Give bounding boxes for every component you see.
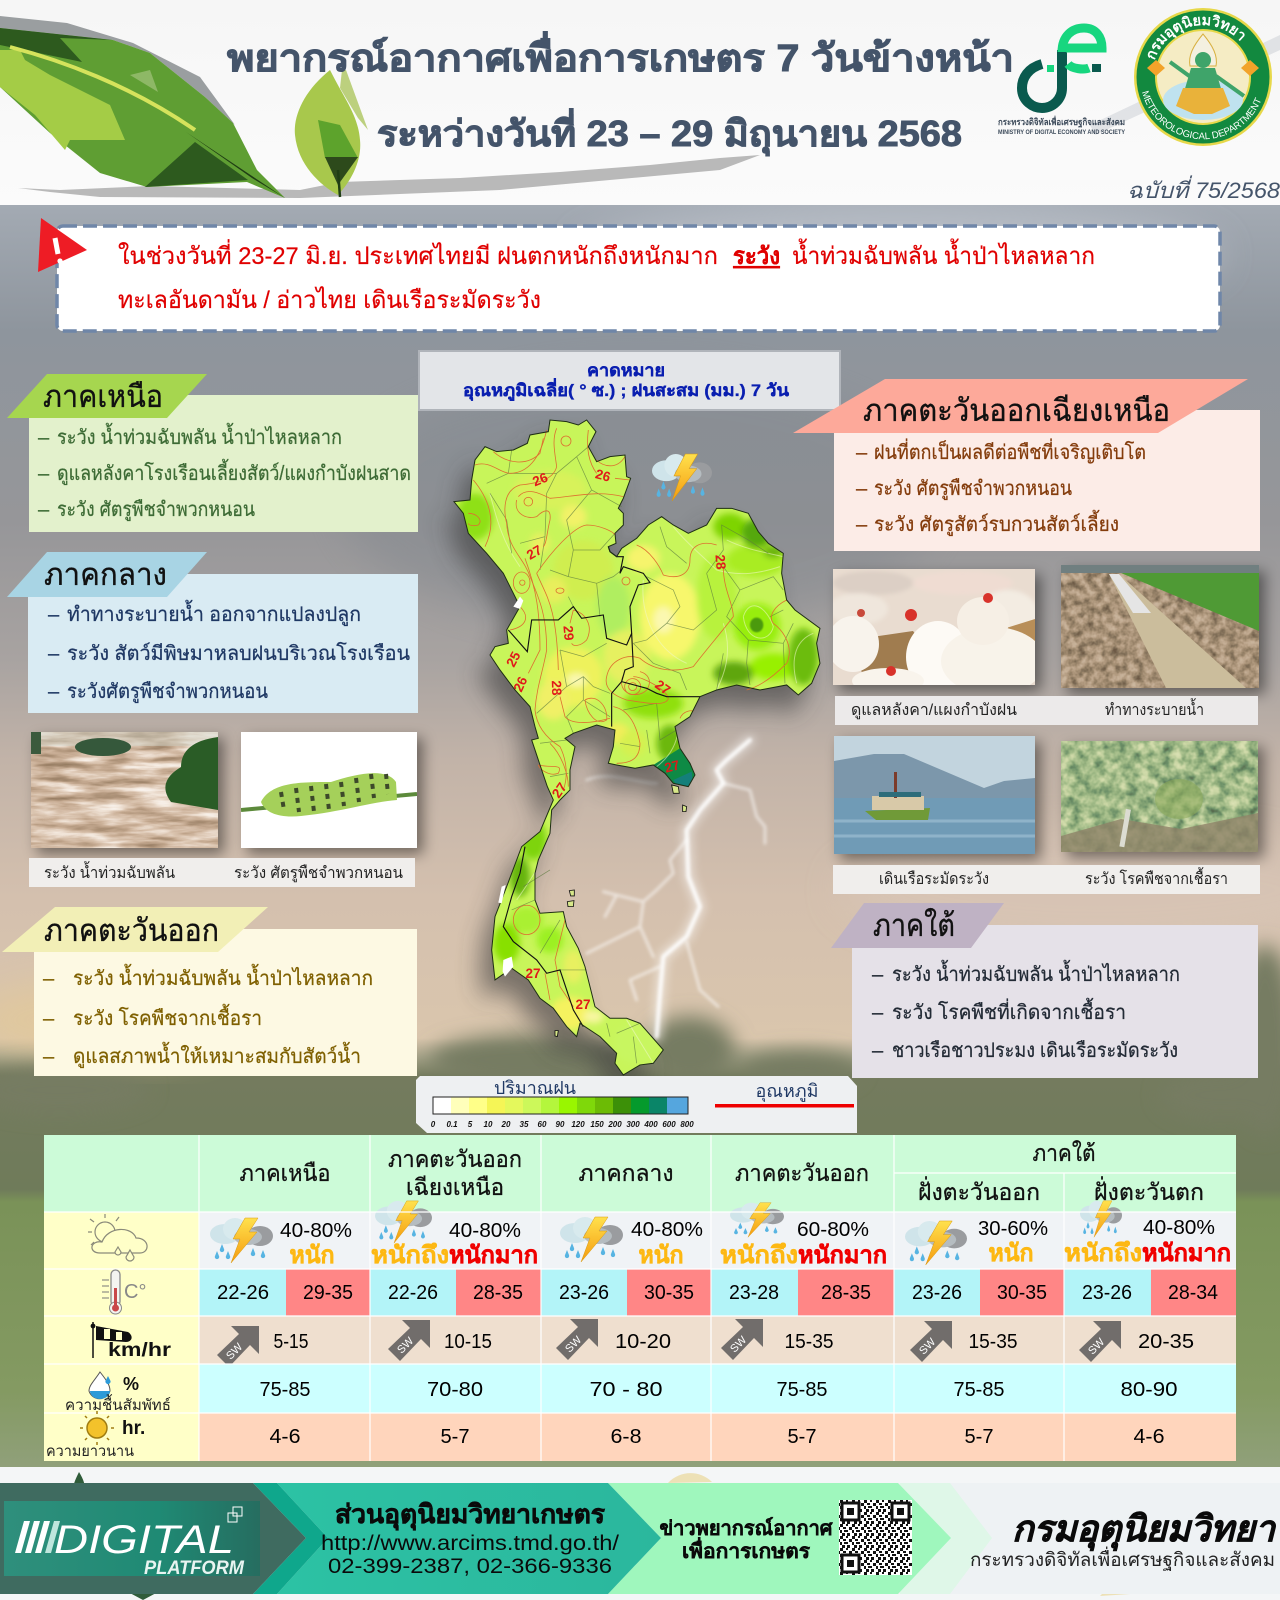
- icon: windsock with unit: [91, 1322, 172, 1361]
- caption bar: west photos: ระวัง ศัตรูพืชจำพวกหนอน: [234, 864, 403, 883]
- caption bar: south photos: ระวัง โรคพืชจากเชื้อรา: [1085, 867, 1228, 888]
- footer: agromet news: ข่าวพยากรณ์อากาศ: [660, 1517, 834, 1540]
- panel: central: –: [48, 681, 60, 703]
- row label column: [44, 1212, 199, 1461]
- temperature labels: 25: [503, 649, 524, 669]
- legend: rainfall and temperature: 35: [520, 1120, 529, 1129]
- temperature labels: 26: [530, 470, 550, 489]
- weather row: หนัก: [988, 1240, 1034, 1267]
- alert box: น้ำท่วมฉับพลัน น้ำป่าไหลหลาก: [792, 238, 1095, 270]
- panel: central: –: [48, 604, 60, 626]
- digital platform logo: PLATFORM: [144, 1558, 245, 1579]
- table header row: ภาคใต้: [1032, 1140, 1096, 1166]
- panel: east: ระวัง น้ำท่วมฉับพลัน น้ำป่าไหลหลาก: [73, 964, 373, 990]
- icon: sunshine: [46, 1411, 145, 1460]
- panel: legend heading: อุณหภูมิเฉลี่ย( ° ซ.) ; ฝนสะสม (มม.) 7 วัน: [463, 378, 789, 402]
- weather row: 40-80%: [449, 1220, 521, 1242]
- humidity row: [199, 1364, 1236, 1413]
- heading tab: south: [831, 903, 1004, 948]
- panel: north: ดูแลหลังคาโรงเรือนเลี้ยงสัตว์/แผงกำบังฝนสาด: [57, 459, 411, 486]
- panel: northeast: [793, 379, 1260, 551]
- table header row: ภาคเหนือ: [240, 1160, 330, 1186]
- wind row: 15-35: [784, 1331, 834, 1353]
- panel: northeast: ระวัง ศัตรูพืชจำพวกหนอน: [874, 478, 1072, 501]
- temperature row: [199, 1269, 1236, 1316]
- legend: rainfall and temperature: 90: [556, 1120, 565, 1129]
- temperature labels: 27: [524, 542, 545, 563]
- temperature labels: 28: [712, 554, 729, 571]
- temperature row: 23-26: [912, 1282, 962, 1304]
- panel: northeast: –: [856, 442, 868, 464]
- legend: rainfall and temperature: 200: [607, 1120, 622, 1129]
- footer: agromet division contact: ส่วนอุตุนิยมวิทยาเกษตร: [335, 1499, 605, 1531]
- caption bar: south photos: เดินเรือระมัดระวัง: [879, 870, 989, 888]
- legend: rainfall and temperature: 150: [590, 1120, 604, 1129]
- forecast table: [44, 1135, 1236, 1461]
- logo: ministry of digital economy: MINISTRY OF DIGITAL ECONOMY AND SOCIETY: [998, 129, 1126, 136]
- table header row: ภาคตะวันออก: [388, 1146, 522, 1172]
- footer: agromet division contact: [321, 1499, 619, 1578]
- temperature row: 29-35: [303, 1282, 353, 1304]
- table grid lines: [44, 1135, 1236, 1461]
- panel: south: –: [872, 1040, 884, 1062]
- wind row: 5-15: [274, 1331, 308, 1353]
- temperature labels: 26: [510, 674, 531, 694]
- temperature row: 28-35: [821, 1282, 871, 1304]
- weather row: หนักมาก: [449, 1242, 538, 1269]
- temperature row: 30-35: [644, 1282, 694, 1304]
- weather row: 40-80%: [1143, 1217, 1215, 1239]
- sunshine row: 5-7: [440, 1426, 470, 1448]
- temperature labels: 27: [575, 997, 591, 1012]
- humidity row: 70 - 80: [590, 1379, 662, 1401]
- edition number: ฉบับที่ 75/2568: [1127, 175, 1280, 203]
- photo: chickens: [827, 569, 1045, 695]
- legend: rainfall and temperature: อุณหภูมิ: [756, 1081, 818, 1102]
- regional borders: [454, 420, 820, 1075]
- humidity row: 75-85: [954, 1379, 1004, 1401]
- humidity row: 75-85: [776, 1379, 828, 1401]
- footer: agromet division contact: 02-399-2387, 02-366-9336: [328, 1555, 612, 1578]
- heading tab: central: ภาคกลาง: [44, 557, 167, 592]
- photo: fishing boat: [834, 736, 1035, 854]
- legend: rainfall and temperature: 60: [538, 1120, 547, 1129]
- weather row: 40-80%: [280, 1220, 352, 1242]
- panel: north: –: [38, 463, 50, 485]
- icon: humidity: [65, 1372, 171, 1414]
- sunshine row: 6-8: [610, 1426, 642, 1448]
- weather row: หนัก: [290, 1242, 334, 1269]
- caption bar: west photos: [29, 858, 415, 887]
- weather row: หนักถึง: [720, 1242, 798, 1269]
- icon: small leaf: [295, 70, 368, 197]
- icon: sunshine: hr.: [122, 1418, 145, 1439]
- sunshine row: [199, 1413, 1236, 1461]
- caption bar: south photos: [833, 865, 1260, 894]
- legend: rainfall and temperature: 5: [468, 1120, 473, 1129]
- wind row: 20-35: [1138, 1331, 1194, 1353]
- table header row: ฝั่งตะวันตก: [1094, 1176, 1204, 1205]
- legend: rainfall and temperature: 400: [643, 1120, 658, 1129]
- footer: agromet news: เพื่อการเกษตร: [682, 1536, 810, 1563]
- table header row: ภาคตะวันออก: [735, 1160, 869, 1186]
- background: stormy sky and field: [0, 205, 1280, 1467]
- panel: south: ระวัง น้ำท่วมฉับพลัน น้ำป่าไหลหลาก: [892, 960, 1180, 986]
- panel: legend heading: [419, 351, 840, 410]
- logo: meteorological department seal: กรมอุตุนิยมวิทยา: [1148, 14, 1245, 60]
- temperature row: 28-35: [473, 1282, 523, 1304]
- legend: rainfall and temperature: 300: [626, 1120, 640, 1129]
- table header row: ฝั่งตะวันออก: [918, 1176, 1040, 1205]
- table header row: ภาคกลาง: [578, 1160, 674, 1186]
- temperature labels: [503, 466, 729, 1012]
- icon: thermometer: C°: [124, 1281, 146, 1303]
- sunshine row: 5-7: [964, 1426, 994, 1448]
- wind row: [199, 1316, 1236, 1367]
- temperature labels: 27: [549, 780, 570, 801]
- weather row: [199, 1201, 1236, 1269]
- caption bar: northeast photos: ดูแลหลังคา/แผงกำบังฝน: [851, 702, 1017, 720]
- temperature row: 23-26: [559, 1282, 609, 1304]
- icon: humidity: ความชื้นสัมพัทธ์: [65, 1394, 171, 1414]
- humidity row: 80-90: [1120, 1379, 1178, 1401]
- temperature labels: 27: [652, 677, 673, 698]
- weather row: หนักมาก: [798, 1242, 887, 1269]
- heading tab: north: ภาคเหนือ: [43, 379, 163, 414]
- panel: east: ระวัง โรคพืชจากเชื้อรา: [73, 1004, 262, 1030]
- heading tab: northeast: ภาคตะวันออกเฉียงเหนือ: [863, 393, 1170, 428]
- humidity row: 75-85: [260, 1379, 310, 1401]
- temperature row: 23-28: [729, 1282, 779, 1304]
- panel: central: ระวังศัตรูพืชจำพวกหนอน: [67, 681, 268, 704]
- footer: agromet news: [660, 1517, 834, 1563]
- temperature row: 30-35: [997, 1282, 1047, 1304]
- legend: rainfall and temperature: 10: [484, 1120, 493, 1129]
- weather row: หนักมาก: [1142, 1240, 1231, 1267]
- legend: rainfall and temperature: 0.1: [446, 1120, 458, 1129]
- panel: central: –: [48, 643, 60, 665]
- legend: rainfall and temperature: 120: [571, 1120, 585, 1129]
- weather row: หนัก: [638, 1242, 684, 1269]
- panel: south: –: [872, 1002, 884, 1024]
- temperature labels: 27: [525, 966, 541, 981]
- title: พยากรณ์อากาศเพื่อการเกษตร 7 วันข้างหน้า: [227, 31, 1014, 80]
- panel: east: ดูแลสภาพน้ำให้เหมาะสมกับสัตว์น้ำ: [73, 1042, 361, 1069]
- temperature labels: 29: [560, 625, 577, 641]
- subtitle: date range: ระหว่างวันที่ 23 – 29 มิถุนายน 2568: [377, 108, 962, 157]
- isohyet bands: [490, 493, 813, 1063]
- wind row: 15-35: [968, 1331, 1018, 1353]
- panel: north: ระวัง ศัตรูพืชจำพวกหนอน: [57, 499, 255, 522]
- footer band: [0, 1467, 1280, 1600]
- alert box: ทะเลอันดามัน / อ่าวไทย เดินเรือระมัดระวัง: [118, 286, 541, 314]
- digital platform logo: DIGITAL: [54, 1518, 234, 1562]
- logo: ministry of digital economy: [998, 28, 1126, 136]
- legend: rainfall and temperature: 20: [501, 1120, 511, 1129]
- table header row: เฉียงเหนือ: [406, 1174, 504, 1200]
- panel: east: –: [43, 1046, 55, 1068]
- panel: northeast: –: [856, 478, 868, 500]
- panel: east: –: [43, 1008, 55, 1030]
- heading tab: north: [7, 374, 207, 418]
- logo: meteorological department seal: METEOROLOGICAL DEPARTMENT: [1142, 90, 1260, 140]
- panel: northeast: –: [856, 514, 868, 536]
- heading tab: northeast: [793, 379, 1248, 433]
- table header row: [44, 1135, 1236, 1212]
- footer: department name: [970, 1508, 1277, 1571]
- photo: drainage ditch: [1061, 565, 1259, 688]
- weather row: 30-60%: [978, 1218, 1048, 1240]
- panel: central: ระวัง สัตว์มีพิษมาหลบฝนบริเวณโรงเรือน: [67, 642, 410, 665]
- weather row: หนักถึง: [1064, 1240, 1142, 1267]
- caption bar: west photos: ระวัง น้ำท่วมฉับพลัน: [44, 861, 175, 882]
- panel: north: [7, 374, 418, 532]
- icon: humidity: %: [123, 1374, 139, 1394]
- sunshine row: 4-6: [270, 1426, 300, 1448]
- panel: south: ชาวเรือชาวประมง เดินเรือระมัดระวัง: [892, 1040, 1178, 1062]
- sunshine row: 4-6: [1134, 1426, 1164, 1448]
- panel: northeast: ระวัง ศัตรูสัตว์รบกวนสัตว์เลี้ยง: [874, 510, 1119, 537]
- rainfall colour scale: [433, 1097, 688, 1114]
- panel: east: –: [43, 968, 55, 990]
- legend: rainfall and temperature: 600: [662, 1120, 676, 1129]
- map of thailand: [440, 410, 840, 1095]
- panel: legend heading: คาดหมาย: [587, 361, 665, 380]
- lightning bolt: [587, 740, 765, 1037]
- weather row: หนักถึง: [371, 1242, 449, 1269]
- photo: caterpillar: [241, 732, 417, 848]
- legend: rainfall and temperature: 0: [431, 1120, 436, 1129]
- icon: thermometer: [102, 1270, 146, 1314]
- heading tab: east: [2, 907, 268, 952]
- caption bar: northeast photos: [835, 696, 1258, 725]
- qr code: [839, 1500, 912, 1575]
- footer: agromet division contact: http://www.arcims.tmd.go.th/: [321, 1532, 619, 1555]
- panel: east: [2, 907, 417, 1076]
- header band: [0, 0, 1280, 205]
- swoosh: [18, 155, 760, 198]
- panel: south: –: [872, 964, 884, 986]
- weather row: 60-80%: [797, 1219, 869, 1241]
- humidity row: 70-80: [427, 1379, 483, 1401]
- icon: storm over map: [652, 454, 712, 501]
- icon: large leaf: [0, 28, 285, 198]
- legend: rainfall and temperature: ปริมาณฝน: [494, 1078, 576, 1098]
- icon: sun and cloud: [88, 1214, 147, 1261]
- panel: central: [7, 552, 418, 713]
- icon: sunshine: ความยาวนาน: [46, 1443, 134, 1460]
- legend: rainfall and temperature: [416, 1076, 857, 1133]
- footer: department name: กรมอุตุนิยมวิทยา: [1012, 1508, 1277, 1551]
- heading tab: south: ภาคใต้: [873, 908, 955, 943]
- footer: department name: กระทรวงดิจิทัลเพื่อเศรษฐกิจและสังคม: [970, 1546, 1275, 1571]
- heading tab: east: ภาคตะวันออก: [44, 913, 219, 948]
- weather row: 40-80%: [631, 1219, 703, 1241]
- panel: south: [831, 903, 1258, 1078]
- alert box: ในช่วงวันที่ 23-27 มิ.ย. ประเทศไทยมี ฝนตกหนักถึงหนักมาก: [118, 239, 718, 270]
- legend: rainfall and temperature: 800: [680, 1120, 694, 1129]
- icon: warning flag: [38, 218, 87, 272]
- photo: diseased tree: [1061, 741, 1258, 852]
- wind row: 10-20: [615, 1331, 671, 1353]
- provinces: [487, 447, 793, 1063]
- logo: ministry of digital economy: กระทรวงดิจิทัลเพื่อเศรษฐกิจและสังคม: [998, 115, 1125, 128]
- temperature labels: 26: [594, 466, 613, 485]
- alert box: [38, 218, 1220, 331]
- alert box: ระวัง: [733, 243, 780, 270]
- icon: windsock with unit: km/hr: [108, 1340, 172, 1361]
- photo: flash flood: [31, 732, 218, 848]
- caption bar: northeast photos: ทำทางระบายน้ำ: [1105, 698, 1204, 719]
- temperature row: 28-34: [1168, 1282, 1218, 1304]
- temperature labels: 28: [549, 680, 564, 696]
- temperature row: 22-26: [217, 1282, 269, 1304]
- logo: meteorological department seal: [1134, 8, 1272, 146]
- panel: north: –: [38, 499, 50, 521]
- digital platform logo: [4, 1501, 260, 1579]
- wind row: 10-15: [444, 1331, 492, 1353]
- temperature labels: 27: [663, 757, 681, 776]
- panel: south: ระวัง โรคพืชที่เกิดจากเชื้อรา: [892, 998, 1126, 1024]
- sunshine row: 5-7: [788, 1426, 816, 1448]
- contours: [468, 428, 789, 1007]
- heading tab: central: [7, 552, 207, 597]
- panel: north: –: [38, 427, 50, 449]
- temperature row: 23-26: [1082, 1282, 1132, 1304]
- panel: northeast: ฝนที่ตกเป็นผลดีต่อพืชที่เจริญเติบโต: [874, 438, 1146, 464]
- panel: central: ทำทางระบายน้ำ ออกจากแปลงปลูก: [67, 600, 361, 627]
- temperature row: 22-26: [388, 1282, 438, 1304]
- panel: north: ระวัง น้ำท่วมฉับพลัน น้ำป่าไหลหลาก: [57, 423, 342, 449]
